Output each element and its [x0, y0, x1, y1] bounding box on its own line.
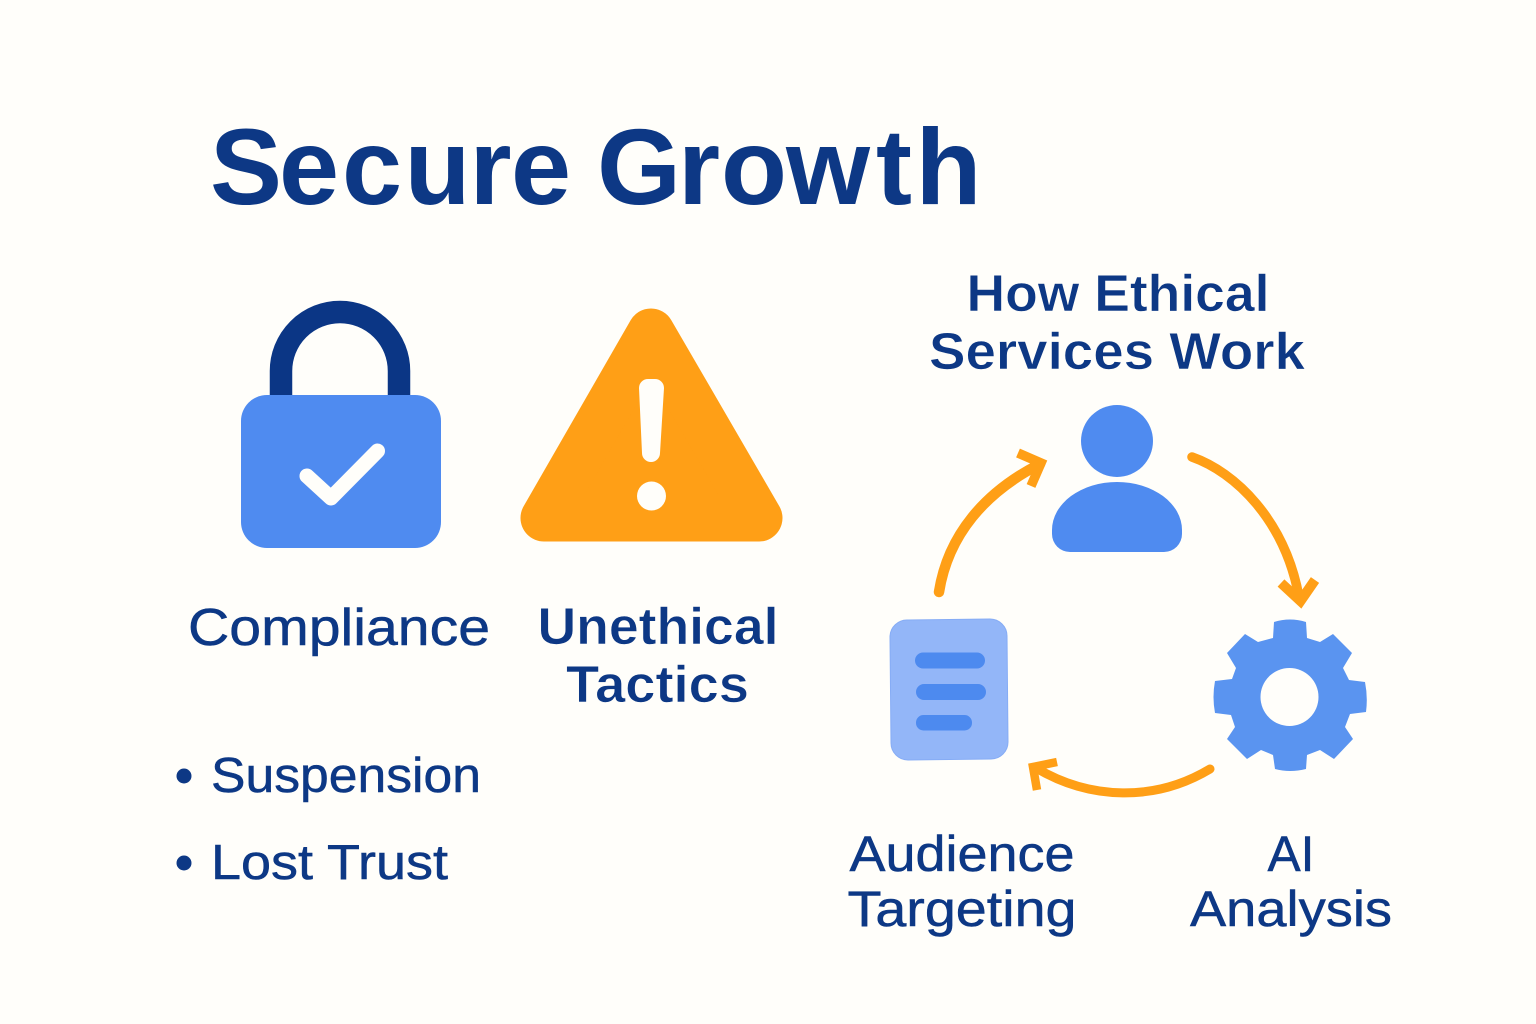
label: unethical tactics: Unethical	[538, 598, 778, 656]
label: ai analysis: Analysis	[1190, 881, 1392, 937]
title	[210, 106, 981, 227]
arrow: document to person	[939, 453, 1041, 592]
label: audience targeting	[848, 826, 1076, 937]
arrow: person to gear	[1192, 457, 1315, 601]
label: unethical tactics	[538, 598, 778, 714]
icon: warning triangle	[544, 332, 759, 518]
label: ai analysis	[1190, 826, 1392, 937]
label: ai analysis: AI	[1268, 826, 1314, 882]
label: audience targeting: Targeting	[848, 881, 1076, 937]
bullet list: Suspension	[211, 749, 481, 803]
icon: document	[890, 619, 1008, 760]
icon: person	[1052, 405, 1182, 552]
title: Secure	[210, 106, 571, 227]
arrow: gear to document	[1033, 762, 1210, 793]
label: unethical tactics: Tactics	[566, 656, 749, 714]
heading: how ethical services work: How Ethical	[966, 265, 1270, 323]
label: audience targeting: Audience	[850, 826, 1074, 882]
label: compliance: Compliance	[188, 599, 490, 657]
title: Growth	[597, 106, 981, 227]
icon: gear	[1214, 620, 1367, 771]
heading: how ethical services work	[929, 265, 1305, 381]
icon: padlock with check	[241, 312, 441, 548]
heading: how ethical services work: Services Work	[929, 323, 1305, 381]
bullet list	[176, 749, 481, 890]
bullet list: Lost Trust	[211, 836, 448, 890]
